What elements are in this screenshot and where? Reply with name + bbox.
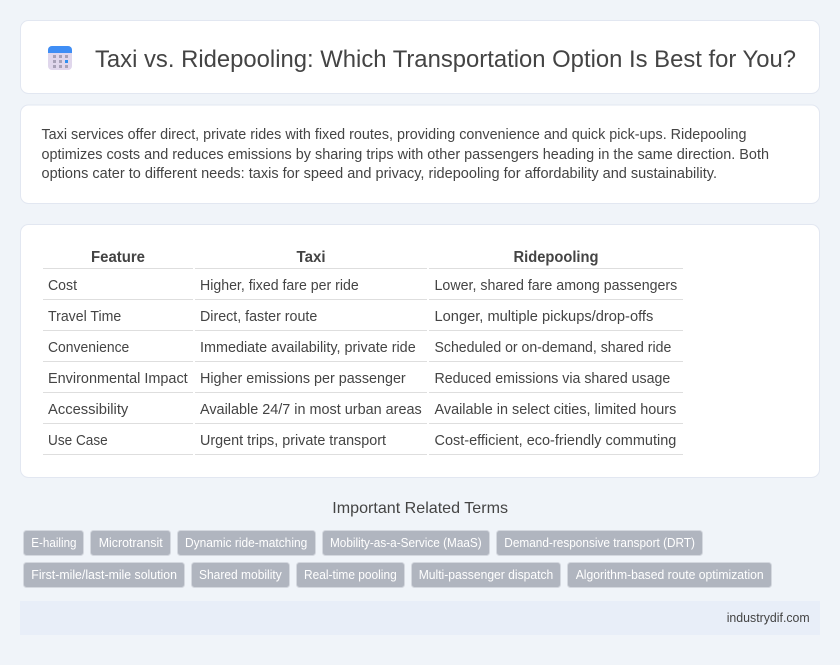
table row: cost: Lower, shared fare among passengers	[434, 278, 677, 294]
table row: environmental impact: Environmental Impact	[48, 371, 188, 387]
tag: Shared mobility	[192, 562, 290, 588]
tag: Real-time pooling: Real-time pooling	[304, 568, 397, 582]
tag list: related terms	[24, 530, 772, 588]
tag: E-hailing	[24, 530, 84, 556]
table row: convenience	[48, 340, 671, 356]
table header row	[91, 249, 598, 266]
tag: Mobility-as-a-Service: Mobility-as-a-Service (MaaS)	[330, 536, 482, 550]
panel: header	[20, 20, 820, 94]
tag: Multi-passenger dispatch: Multi-passenger dispatch	[419, 568, 553, 582]
tag: E-hailing: E-hailing	[31, 536, 77, 550]
table row: travel time: Direct, faster route	[200, 309, 317, 325]
text block: introduction: optimizes costs and reduces emissions by sharing trips with other passengers heading in the same direction. Both	[42, 147, 769, 163]
table row: use case: Use Case	[48, 433, 108, 449]
table row: cost	[48, 278, 677, 294]
table row: accessibility	[48, 402, 676, 418]
table header row: Feature	[91, 249, 145, 266]
tag: Dynamic ride-matching: Dynamic ride-matching	[185, 536, 307, 550]
tag: Mobility-as-a-Service	[322, 530, 490, 556]
title: Taxi vs. Ridepooling: Which Transportation Option Is Best for You?	[95, 46, 796, 73]
table row: environmental impact	[48, 371, 670, 387]
table row: accessibility: Available 24/7 in most urban areas	[200, 402, 422, 418]
tag: Microtransit	[90, 530, 170, 556]
table row: environmental impact: Higher emissions per passenger	[200, 371, 406, 387]
icon: calendar	[48, 46, 72, 70]
table row: travel time: Travel Time	[48, 309, 121, 325]
table header row: Ridepooling	[514, 249, 598, 266]
tag: Algorithm-based route optimization	[568, 562, 772, 588]
tag: Real-time pooling	[296, 562, 404, 588]
table row: use case: Urgent trips, private transport	[200, 433, 386, 449]
text block: introduction: options cater to different needs: taxis for speed and privacy, ridepooling for affordability and sustainability.	[42, 166, 717, 182]
heading: important related terms: Important Related Terms	[332, 500, 508, 517]
panel: introduction	[20, 105, 820, 204]
tag: Microtransit: Microtransit	[99, 536, 163, 550]
tag: Demand-responsive transport	[496, 530, 702, 556]
tag: Algorithm-based route optimization: Algorithm-based route optimization	[576, 568, 764, 582]
tag: Dynamic ride-matching	[178, 530, 316, 556]
table row: cost: Higher, fixed fare per ride	[200, 278, 359, 294]
tag: Multi-passenger dispatch	[412, 562, 560, 588]
footer	[20, 601, 820, 635]
table row: cost: Cost	[48, 278, 77, 294]
table row: convenience: Convenience	[48, 340, 129, 356]
table row: environmental impact: Reduced emissions via shared usage	[434, 371, 670, 387]
table row: convenience: Scheduled or on-demand, shared ride	[434, 340, 671, 356]
table row: accessibility: Available in select cities, limited hours	[434, 402, 676, 418]
table row: convenience: Immediate availability, private ride	[200, 340, 416, 356]
panel: comparison table	[20, 224, 820, 478]
table row: use case: Cost-efficient, eco-friendly commuting	[434, 433, 676, 449]
table row: accessibility: Accessibility	[48, 402, 129, 418]
tag: First-mile/last-mile solution	[24, 562, 184, 588]
text block: introduction: Taxi services offer direct, private rides with fixed routes, providing convenience and quick pick-ups. Ridepooling	[42, 127, 746, 143]
table row: travel time	[48, 309, 653, 325]
footer: industrydif.com	[727, 611, 810, 625]
table row: use case	[48, 433, 676, 449]
tag: First-mile/last-mile solution: First-mile/last-mile solution	[31, 568, 177, 582]
table header row: Taxi	[296, 249, 326, 266]
text block: introduction	[42, 127, 769, 182]
tag: Demand-responsive transport: Demand-responsive transport (DRT)	[504, 536, 695, 550]
table row: travel time: Longer, multiple pickups/drop-offs	[434, 309, 653, 325]
tag: Shared mobility: Shared mobility	[199, 568, 282, 582]
